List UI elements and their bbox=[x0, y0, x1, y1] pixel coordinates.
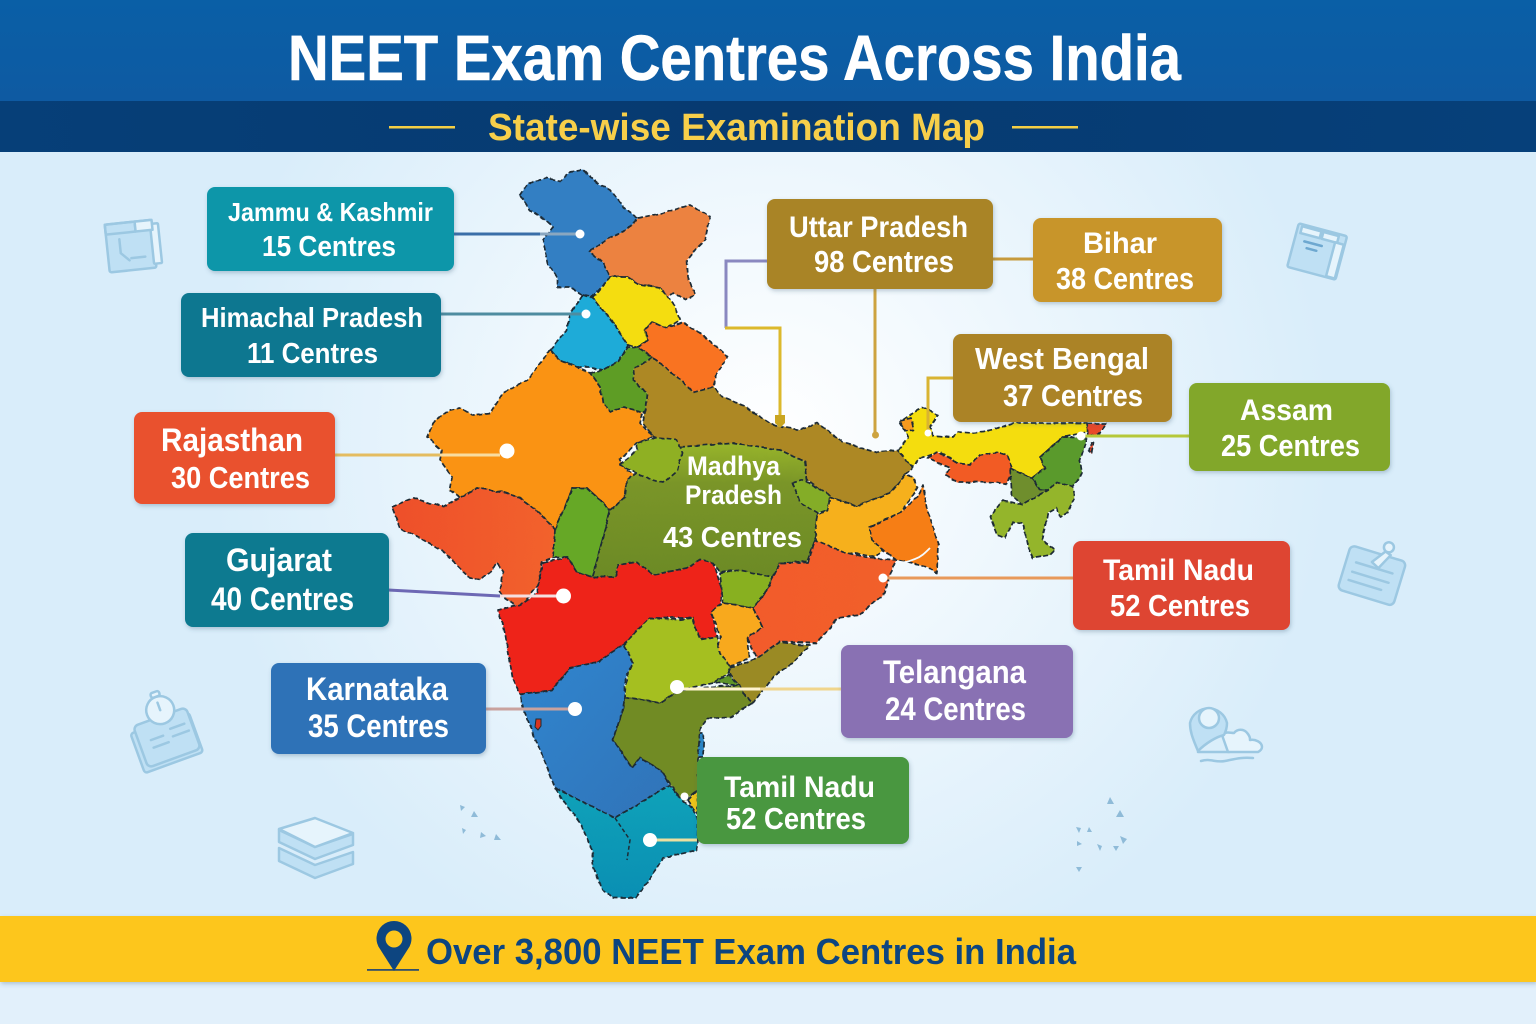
state: Madhya Pradesh bbox=[592, 443, 818, 577]
state: Bangladesh strip bbox=[927, 452, 1012, 485]
icon: clipboard note right bbox=[1337, 532, 1410, 606]
state: Telangana bbox=[623, 618, 730, 703]
state: small green north bbox=[590, 347, 652, 412]
state: Uttar Pradesh bbox=[633, 357, 913, 506]
card: Karnataka: Karnataka bbox=[306, 671, 448, 707]
card: Tamil Nadu east: Tamil Nadu bbox=[1103, 554, 1254, 587]
map label: Madhya Pradesh: Pradesh bbox=[685, 480, 782, 510]
subtitle: State-wise Examination Map bbox=[488, 107, 985, 149]
state: coastal olive bbox=[728, 642, 810, 703]
title: NEET Exam Centres Across India bbox=[288, 22, 1181, 94]
card: Himachal Pradesh bbox=[181, 293, 441, 377]
card: Uttar Pradesh: 98 Centres bbox=[814, 244, 954, 279]
card: Assam: Assam bbox=[1240, 394, 1333, 427]
state: north-east green bbox=[1032, 437, 1087, 490]
card: Gujarat: Gujarat bbox=[226, 542, 332, 578]
state: eastern red tip bbox=[1087, 424, 1107, 436]
card: Gujarat bbox=[185, 533, 389, 627]
state: Karnataka bbox=[520, 645, 670, 818]
card: Telangana: Telangana bbox=[883, 654, 1026, 690]
map label: Madhya Pradesh: 43 Centres bbox=[663, 522, 802, 554]
card: Rajasthan: Rajasthan bbox=[161, 422, 303, 458]
leader: West Bengal bbox=[924, 378, 953, 436]
footer text: Over 3,800 NEET Exam Centres in India bbox=[426, 931, 1077, 972]
card: Rajasthan bbox=[134, 412, 335, 504]
card: Himachal Pradesh: Himachal Pradesh bbox=[201, 302, 423, 333]
state: eastern orange bbox=[870, 485, 938, 573]
state: northern sky blue bbox=[550, 295, 628, 370]
card: Uttar Pradesh: Uttar Pradesh bbox=[789, 211, 968, 244]
card: Tamil Nadu south: Tamil Nadu bbox=[724, 771, 875, 804]
state: north-east lime bbox=[990, 482, 1075, 558]
icon: calendar top-left bbox=[105, 219, 162, 272]
state: north-east olive bbox=[1010, 468, 1048, 505]
icon: stack of books bbox=[279, 818, 353, 878]
leader: Uttar Pradesh gold bbox=[872, 289, 879, 438]
state: small north-east orange bbox=[900, 418, 914, 431]
state: Gujarat bbox=[392, 488, 555, 608]
state: Jharkhand area bbox=[815, 475, 917, 557]
decoration: scattered triangles left bbox=[460, 805, 501, 840]
state: east coast red-orange bbox=[748, 540, 897, 658]
leader: Tamil Nadu south bbox=[643, 792, 697, 847]
card: Tamil Nadu east: 52 Centres bbox=[1110, 588, 1250, 623]
icon: map pin with cloud bbox=[1190, 708, 1262, 761]
card: Himachal Pradesh: 11 Centres bbox=[247, 338, 378, 370]
leader: Himachal Pradesh bbox=[441, 310, 590, 318]
state: northern yellow bbox=[593, 277, 680, 348]
state: small green patch bbox=[713, 675, 740, 685]
leader: Jammu and Kashmir bbox=[453, 230, 584, 238]
map label: Madhya Pradesh: Madhya bbox=[687, 451, 781, 481]
state: central lime small bbox=[720, 570, 773, 608]
card: Jammu and Kashmir: 15 Centres bbox=[262, 231, 396, 263]
state: eastern red sliver bbox=[1089, 443, 1094, 454]
card: Jammu and Kashmir: Jammu & Kashmir bbox=[228, 197, 433, 227]
state: light green north of MP bbox=[620, 438, 682, 483]
leader: Assam bbox=[1076, 432, 1189, 440]
leader: Tamil Nadu east bbox=[878, 574, 1073, 582]
card: Karnataka bbox=[271, 663, 486, 754]
decoration: scattered triangles right bbox=[1076, 797, 1127, 872]
state: northern orange bbox=[638, 322, 728, 392]
card: Rajasthan: 30 Centres bbox=[171, 460, 310, 495]
state: Ladakh bbox=[590, 205, 710, 300]
icon: notebook top-right bbox=[1287, 223, 1347, 280]
leader: Telangana bbox=[670, 680, 841, 694]
india state map bbox=[392, 170, 1107, 898]
kerala boundary bbox=[615, 818, 630, 860]
state: western green bbox=[553, 488, 610, 577]
state: central amber small bbox=[712, 603, 762, 667]
header band bbox=[0, 0, 1536, 152]
card: Telangana bbox=[841, 645, 1073, 738]
card: West Bengal: West Bengal bbox=[975, 341, 1149, 376]
state: Bengal north-east yellow bbox=[898, 407, 1087, 478]
card: Tamil Nadu east bbox=[1073, 541, 1290, 630]
state: Rajasthan bbox=[427, 350, 653, 530]
bottom strip bbox=[0, 982, 1536, 1024]
card: Assam bbox=[1189, 383, 1390, 471]
east coast river delta bbox=[897, 548, 930, 562]
card: Assam: 25 Centres bbox=[1221, 428, 1360, 463]
card: Tamil Nadu south bbox=[697, 757, 909, 844]
card: West Bengal: 37 Centres bbox=[1003, 378, 1143, 413]
footer banner bbox=[0, 916, 1536, 982]
state: light green east of MP bbox=[792, 480, 830, 513]
state: Kerala and Tamil Nadu bbox=[555, 785, 698, 898]
leader: Gujarat bbox=[388, 588, 571, 604]
card: Karnataka: 35 Centres bbox=[308, 708, 449, 744]
leader: Rajasthan bbox=[335, 444, 514, 458]
card: Uttar Pradesh bbox=[767, 199, 993, 289]
card: Gujarat: 40 Centres bbox=[211, 581, 354, 617]
card: Bihar bbox=[1033, 218, 1222, 302]
card: Jammu and Kashmir bbox=[207, 187, 454, 271]
state: small blue sliver bbox=[697, 733, 704, 757]
card: Telangana: 24 Centres bbox=[885, 691, 1026, 727]
leader: Bihar bbox=[993, 258, 1033, 260]
leader: Uttar Pradesh arrow bbox=[725, 261, 785, 428]
west coast small enclave bbox=[535, 719, 541, 730]
card: Tamil Nadu south: 52 Centres bbox=[726, 801, 866, 836]
state: far south yellow bbox=[688, 790, 698, 815]
card: Bihar: 38 Centres bbox=[1056, 261, 1194, 296]
icon: location pin bbox=[367, 921, 419, 971]
card: Bihar: Bihar bbox=[1083, 227, 1157, 260]
map label: Madhya Pradesh bbox=[663, 451, 802, 554]
state: southern olive bbox=[613, 685, 753, 802]
leader: Karnataka bbox=[486, 702, 582, 716]
icon: book and stopwatch bbox=[120, 683, 203, 773]
state: Maharashtra bbox=[498, 557, 722, 695]
card: West Bengal bbox=[953, 334, 1172, 422]
state: Jammu and Kashmir bbox=[520, 170, 638, 297]
